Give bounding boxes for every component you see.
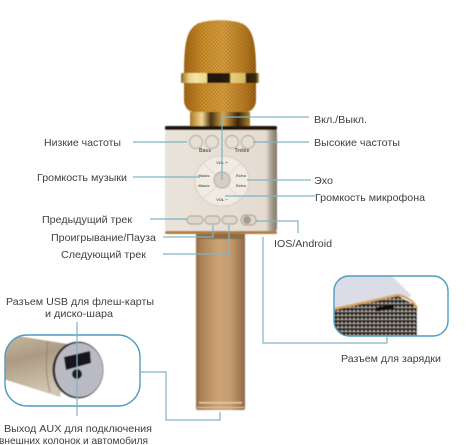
label: power: Вкл./Выкл. <box>314 114 367 126</box>
track buttons <box>187 215 256 225</box>
label: ios android: IOS/Android <box>274 238 332 250</box>
label: high frequencies: Высокие частоты <box>314 137 400 149</box>
button labels: Echo <box>236 173 246 178</box>
bass and treble buttons <box>190 136 254 148</box>
label: usb port: Разъем USB для флеш-карты <box>6 296 154 308</box>
button labels: Treble <box>235 148 250 154</box>
label: echo: Эхо <box>314 175 333 187</box>
leader lines <box>77 117 387 420</box>
microphone <box>165 20 277 410</box>
control body <box>165 126 277 234</box>
label: music volume: Громкость музыки <box>37 172 127 184</box>
button labels: Echo <box>236 183 246 188</box>
label: usb port <box>6 296 154 320</box>
label: usb port: и диско-шара <box>45 308 113 320</box>
label: previous track: Предыдущий трек <box>42 214 132 226</box>
round control pad <box>195 156 249 206</box>
right callout: charging port <box>334 276 448 336</box>
button labels: Music <box>198 173 210 178</box>
mesh head <box>181 20 259 112</box>
label: low frequencies: Низкие частоты <box>44 137 121 149</box>
button labels <box>198 148 250 202</box>
handle <box>196 231 245 410</box>
button labels: Bass <box>199 148 211 154</box>
label: charging port: Разъем для зарядки <box>341 353 441 365</box>
button labels: VOL + <box>216 160 228 165</box>
left callout: USB and AUX ports <box>0 333 140 406</box>
label: play pause: Проигрывание/Пауза <box>51 232 156 244</box>
button labels: VOL − <box>216 197 228 202</box>
label: aux output <box>0 423 152 445</box>
label: aux output: Выход AUX для подключения <box>4 423 152 435</box>
label: next track: Следующий трек <box>61 249 146 261</box>
label: mic volume: Громкость микрофона <box>315 192 425 204</box>
button labels: Music <box>198 183 210 188</box>
collar <box>190 112 250 127</box>
